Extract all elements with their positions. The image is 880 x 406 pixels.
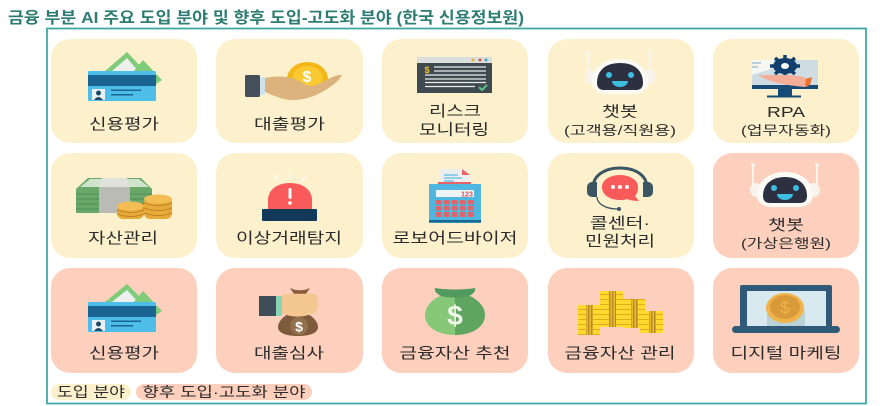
card: 챗봇 가상은행원 (future) [713,153,859,258]
icon: gold coin stacks [578,291,663,335]
label: 민원처리 [585,233,655,250]
icon: laptop with coin: $ [780,298,790,317]
title: 금융 부분 AI 주요 도입 분야 및 향후 도입-고도화 분야 (한국 신용정보원) [8,9,524,27]
card: 금융자산 추천 (future) [382,268,528,373]
icon: hand holding money bag [259,288,318,336]
label: 금융자산 추천 [400,345,510,362]
icon: green money bag [425,288,485,335]
icon: credit card [88,52,162,101]
icon: cash and coins [76,178,172,219]
card: 대출평가 (adopted) [216,39,363,143]
icon: calculator [429,169,481,223]
label: 신용평가 [89,116,159,133]
icon: RPA monitor [752,55,818,98]
label: 이상거래탐지 [236,230,342,247]
icon: laptop with coin [732,285,840,333]
label: 리스크 [429,103,481,120]
icon: hand with coin: $ [303,69,312,86]
icon: monitoring window [417,57,492,93]
label: 대출평가 [254,116,325,133]
label: 챗봇 [602,104,638,120]
card: RPA (adopted) [713,39,859,143]
label: 디지털 마케팅 [730,345,842,362]
icon: chatbot [750,163,820,207]
icon: calculator: 123 [461,192,473,198]
icon: credit card [88,284,162,332]
card: 신용평가 (future) [51,268,197,373]
legend [51,384,312,400]
label: 대출심사 [254,345,324,362]
card: 디지털 마케팅 (future) [713,268,859,373]
label: 챗봇 [768,217,804,234]
card: 금융자산 관리 (future) [548,268,694,373]
label [741,217,831,251]
card: 신용평가 (adopted) [51,39,197,143]
icon: hand with coin [245,62,342,100]
label: 신용평가 [89,345,159,362]
icon: monitoring window: $ [424,65,430,75]
icon: hand holding money bag: $ [295,318,303,334]
label: RPA [767,104,805,121]
icon: chatbot [585,51,655,94]
card: 이상거래탐지 (adopted) [216,153,363,258]
label [564,104,676,138]
label [741,104,831,138]
icon: headset with speech bubble [587,168,653,211]
legend: adopted [51,384,131,400]
legend: future: 향후 도입·고도화 분야 [142,384,306,400]
label [585,215,655,250]
card: 자산관리 (adopted) [51,153,197,258]
icon: siren [262,172,317,221]
icon: green money bag: $ [447,300,463,331]
label: 자산관리 [88,230,158,247]
card: 챗봇 고객용/직원용 (adopted) [548,39,694,143]
card: 대출심사 (future) [216,268,363,373]
card: 콜센터·민원처리 (adopted) [548,153,694,258]
label: (고객용/직원용) [564,123,676,138]
label: (업무자동화) [741,123,831,138]
card: 로보어드바이저 (adopted) [382,153,528,258]
card: 리스크 모니터링 (adopted) [382,39,528,143]
label: 금융자산 관리 [564,345,676,362]
label [419,103,489,138]
label: 모니터링 [419,122,489,138]
legend: adopted: 도입 분야 [57,384,125,400]
label: 콜센터· [590,215,650,232]
label: (가상은행원) [741,236,831,251]
label: 로보어드바이저 [392,230,518,247]
